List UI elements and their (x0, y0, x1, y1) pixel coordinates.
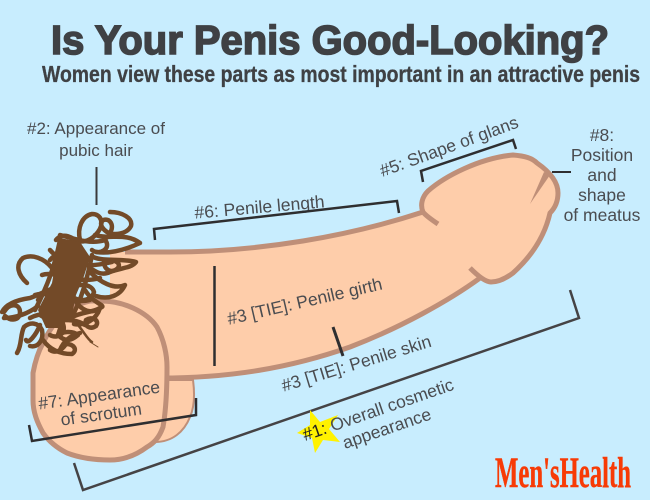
icon: star (297, 410, 340, 453)
bracket: overall appearance (74, 290, 579, 490)
illustration: glans detail (530, 172, 550, 204)
label: meatus: and (587, 165, 617, 185)
label: meatus (552, 125, 641, 225)
label: scrotum: #7: Appearance (37, 377, 161, 413)
label: penile length: #6: Penile length (194, 191, 325, 223)
label: overall appearance: appearance (340, 404, 434, 453)
label: meatus: Position (571, 145, 633, 165)
label: shape of glans: #5: Shape of glans (377, 112, 521, 181)
label: pubic hair: #2: Appearance of (27, 119, 165, 138)
illustration: pubic hair (2, 212, 140, 354)
label: overall appearance: #1: Overall cosmetic (300, 374, 456, 445)
label: pubic hair: pubic hair (59, 141, 133, 160)
label: meatus: #8: (590, 125, 614, 145)
label: pubic hair (27, 119, 165, 205)
label: scrotum (29, 377, 196, 441)
label: penile skin: #3 [TIE]: Penile skin (279, 331, 434, 396)
illustration: shaft outline (125, 155, 558, 378)
illustration: scrotum (33, 301, 167, 460)
label: meatus: shape (578, 185, 626, 205)
illustration: back lobe (155, 380, 194, 442)
label: penile length (154, 191, 399, 240)
title: Is Your Penis Good-Looking? (51, 17, 609, 63)
label: meatus: of meatus (564, 205, 641, 225)
illustration: hair mass (38, 238, 90, 328)
label: scrotum: of scrotum (59, 398, 143, 430)
label: penile girth: #3 [TIE]: Penile girth (225, 274, 384, 329)
illustration: shaft fill (110, 155, 558, 378)
